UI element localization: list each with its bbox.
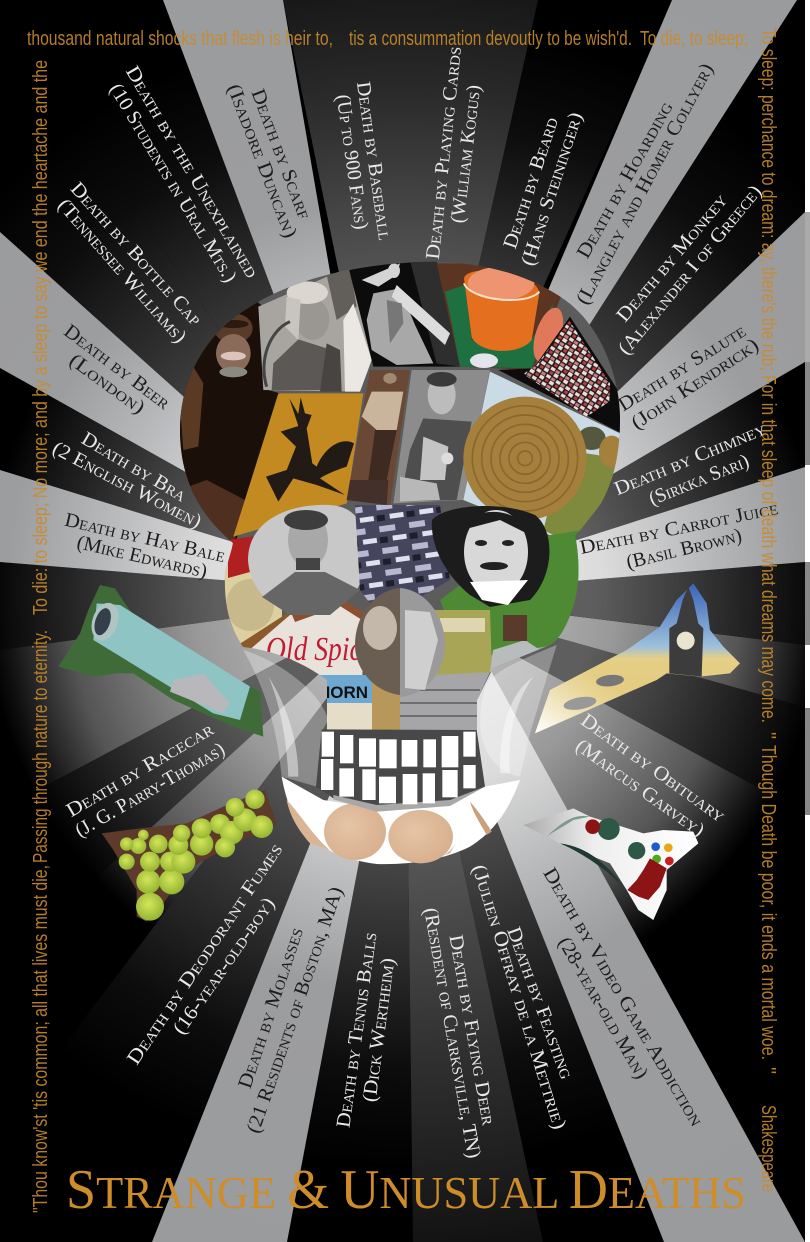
label: Death by Scarf: Death by Scarf bbox=[247, 86, 315, 222]
crossbone cutout: bloody game controller bbox=[523, 808, 698, 920]
quote border: right: Though Death be poor, it ends a mortal woe. bbox=[757, 745, 779, 1060]
icon: bra bbox=[287, 800, 492, 863]
label: Death by Scarf: (Isadore Duncan) bbox=[223, 81, 301, 241]
label: Death by Baseball bbox=[332, 80, 396, 242]
label: Death by Beard: (Hans Steininger) bbox=[517, 110, 587, 268]
photo: racecar driver bbox=[258, 267, 372, 392]
label: Death by Molasses: Death by Molasses bbox=[234, 925, 308, 1091]
label: Death by the Unexplained: (10 Students in Ural Mts.) bbox=[105, 80, 241, 286]
label: Death by Beard: Death by Beard bbox=[499, 115, 563, 251]
label: Death by Hoarding: Death by Hoarding bbox=[572, 98, 678, 262]
label: Death by Baseball: Death by Baseball bbox=[352, 80, 396, 242]
label: Death by the Unexplained: Death by the Unexplained bbox=[121, 62, 263, 282]
quote border: right: Shakespeare bbox=[757, 1105, 779, 1192]
label: Death by Salute: (John Kendrick) bbox=[627, 334, 763, 434]
label: Death by Monkey: (Alexander I of Greece) bbox=[614, 181, 766, 359]
label: Death by Video Game Addiction: Death by Video Game Addiction bbox=[538, 864, 708, 1130]
quote border: top: thousand natural shocks that flesh is heir to, bbox=[27, 28, 333, 50]
title: STRANGE & UNUSUAL DEATHS bbox=[66, 1159, 746, 1221]
photo: flood debris bbox=[355, 505, 450, 610]
quote border: left: Passing through nature to eternity. bbox=[30, 630, 52, 863]
crossbone cutout: Big Ben in desert bbox=[535, 583, 740, 733]
lower jaw bbox=[282, 777, 520, 864]
label: Death by Racecar: (J. G. Parry-Thomas) bbox=[71, 738, 229, 842]
label: Death by Playing Cards: (William Kogus) bbox=[447, 84, 485, 224]
right margin strip bbox=[805, 0, 810, 1242]
label: Death by Salute bbox=[614, 320, 763, 434]
label: Death by Flying Deer: (Resident of Clarksville, TN) bbox=[419, 906, 485, 1160]
label: Death by Playing Cards bbox=[422, 45, 485, 261]
photo: grass field bbox=[440, 530, 582, 668]
label: Death by Feasting: Death by Feasting bbox=[502, 924, 578, 1082]
label: Death by Deodorant Fumes: (16-year-old-boy) bbox=[169, 893, 279, 1039]
label: Death by Beer: (London) bbox=[65, 349, 149, 419]
photo: Old Spice bottle label: HORN bbox=[318, 683, 368, 702]
label: Death by Salute: Death by Salute bbox=[614, 320, 750, 416]
teeth bbox=[321, 732, 476, 804]
label: Death by Hay Bale: Death by Hay Bale bbox=[63, 509, 227, 567]
left horn highlight bbox=[268, 677, 298, 777]
label: Death by Obituary: (Marcus Garvey) bbox=[571, 735, 709, 841]
photo: flying deer emblem bbox=[233, 393, 363, 537]
label: Death by Chimney: Death by Chimney bbox=[611, 418, 769, 500]
skull jaw bbox=[243, 645, 557, 864]
photo: vintage bear illustration bbox=[224, 536, 290, 655]
label: Death by Tennis Balls bbox=[332, 931, 399, 1129]
label: Death by Deodorant Fumes: Death by Deodorant Fumes bbox=[123, 839, 287, 1069]
label: Death by Tennis Balls: Death by Tennis Balls bbox=[332, 931, 382, 1129]
label: Death by Monkey: Death by Monkey bbox=[612, 190, 732, 326]
label: Death by Chimney: (Sirkka Sari) bbox=[646, 450, 752, 510]
label: Death by Playing Cards: Death by Playing Cards bbox=[422, 45, 466, 261]
photo: Old Spice bottle label: Old Spice bbox=[266, 631, 374, 668]
photo: oval portrait, Offray de La Mettrie and deer resident bbox=[355, 588, 445, 697]
photo: portrait of gentleman bbox=[248, 505, 366, 615]
quote border: right: " bbox=[757, 1067, 779, 1074]
photo: woman in hat bbox=[432, 506, 549, 607]
skull cranium photo collage bbox=[170, 250, 630, 740]
quote border: left: "Thou know'st 'tis common; all that lives must die, bbox=[30, 865, 52, 1213]
label: Death by Obituary: Death by Obituary bbox=[577, 709, 729, 827]
quote border: top bbox=[27, 28, 748, 50]
label: Death by Video Game Addiction: (28-year-old Man) bbox=[553, 933, 653, 1083]
label: Death by Feasting: (Julien Offray de la Mettrie) bbox=[467, 862, 571, 1132]
label: Death by Flying Deer: Death by Flying Deer bbox=[444, 933, 500, 1128]
photo: medicine label and bottle bbox=[433, 610, 540, 675]
photo: king in uniform bbox=[393, 370, 490, 503]
photo: Old Spice bottle label bbox=[247, 598, 400, 730]
quote border: right: To sleep: perchance to dream: ay, there's the rub; For in that sleep of death what dreams may come. bbox=[757, 28, 779, 723]
left cheek bbox=[243, 650, 328, 787]
label: Death by Molasses: (21 Residents of Boston, MA) bbox=[242, 884, 348, 1136]
label: Death by Bra: (2 English Women) bbox=[49, 437, 205, 533]
quote border: right: " bbox=[757, 732, 779, 739]
label: Death by Hoarding: (Langley and Homer Collyer) bbox=[572, 60, 718, 308]
label: Death by Bottle Cap: (Tennessee Williams) bbox=[53, 195, 191, 347]
photo: carrot juice bbox=[437, 263, 569, 370]
label: Death by Baseball: (Up to 900 Fans) bbox=[332, 93, 372, 231]
right cheek bbox=[480, 645, 557, 777]
label: Death by Carrot Juice: Death by Carrot Juice bbox=[578, 497, 780, 559]
label: Death by Bra: Death by Bra bbox=[78, 428, 191, 507]
right horn highlight bbox=[500, 677, 533, 773]
photo: hay bale bbox=[463, 372, 624, 543]
label: Death by Bottle Cap: Death by Bottle Cap bbox=[66, 178, 206, 330]
label: Death by Carrot Juice: (Basil Brown) bbox=[624, 524, 744, 574]
quote border: top: tis a consummation devoutly to be wish'd. bbox=[349, 28, 632, 50]
label: Death by Hay Bale: (Mike Edwards) bbox=[75, 531, 209, 583]
crossbone cutout: cannon bbox=[58, 585, 263, 737]
label: Death by Beer: Death by Beer bbox=[60, 320, 175, 414]
lower lip bbox=[333, 787, 485, 812]
label: Death by Scarf bbox=[223, 81, 315, 241]
photo: sepia baseball player bbox=[347, 370, 410, 505]
photo collage upper bbox=[170, 260, 624, 550]
quote border: top: To die, to sleep; bbox=[640, 28, 748, 50]
photo: wood planks bbox=[400, 645, 555, 730]
quote border: left bbox=[30, 60, 52, 1213]
mouth bbox=[316, 729, 485, 811]
label: Death by Beard bbox=[499, 110, 587, 268]
crossbone cutout: tennis balls bbox=[102, 790, 277, 922]
photo: dancer with scarf bbox=[348, 260, 460, 367]
photo: scattered playing cards bbox=[498, 317, 620, 433]
label: Death by Racecar: Death by Racecar bbox=[62, 718, 218, 822]
photo: chimpanzee bbox=[180, 302, 280, 547]
label: Death by Tennis Balls: (Dick Wertheim) bbox=[359, 957, 399, 1103]
